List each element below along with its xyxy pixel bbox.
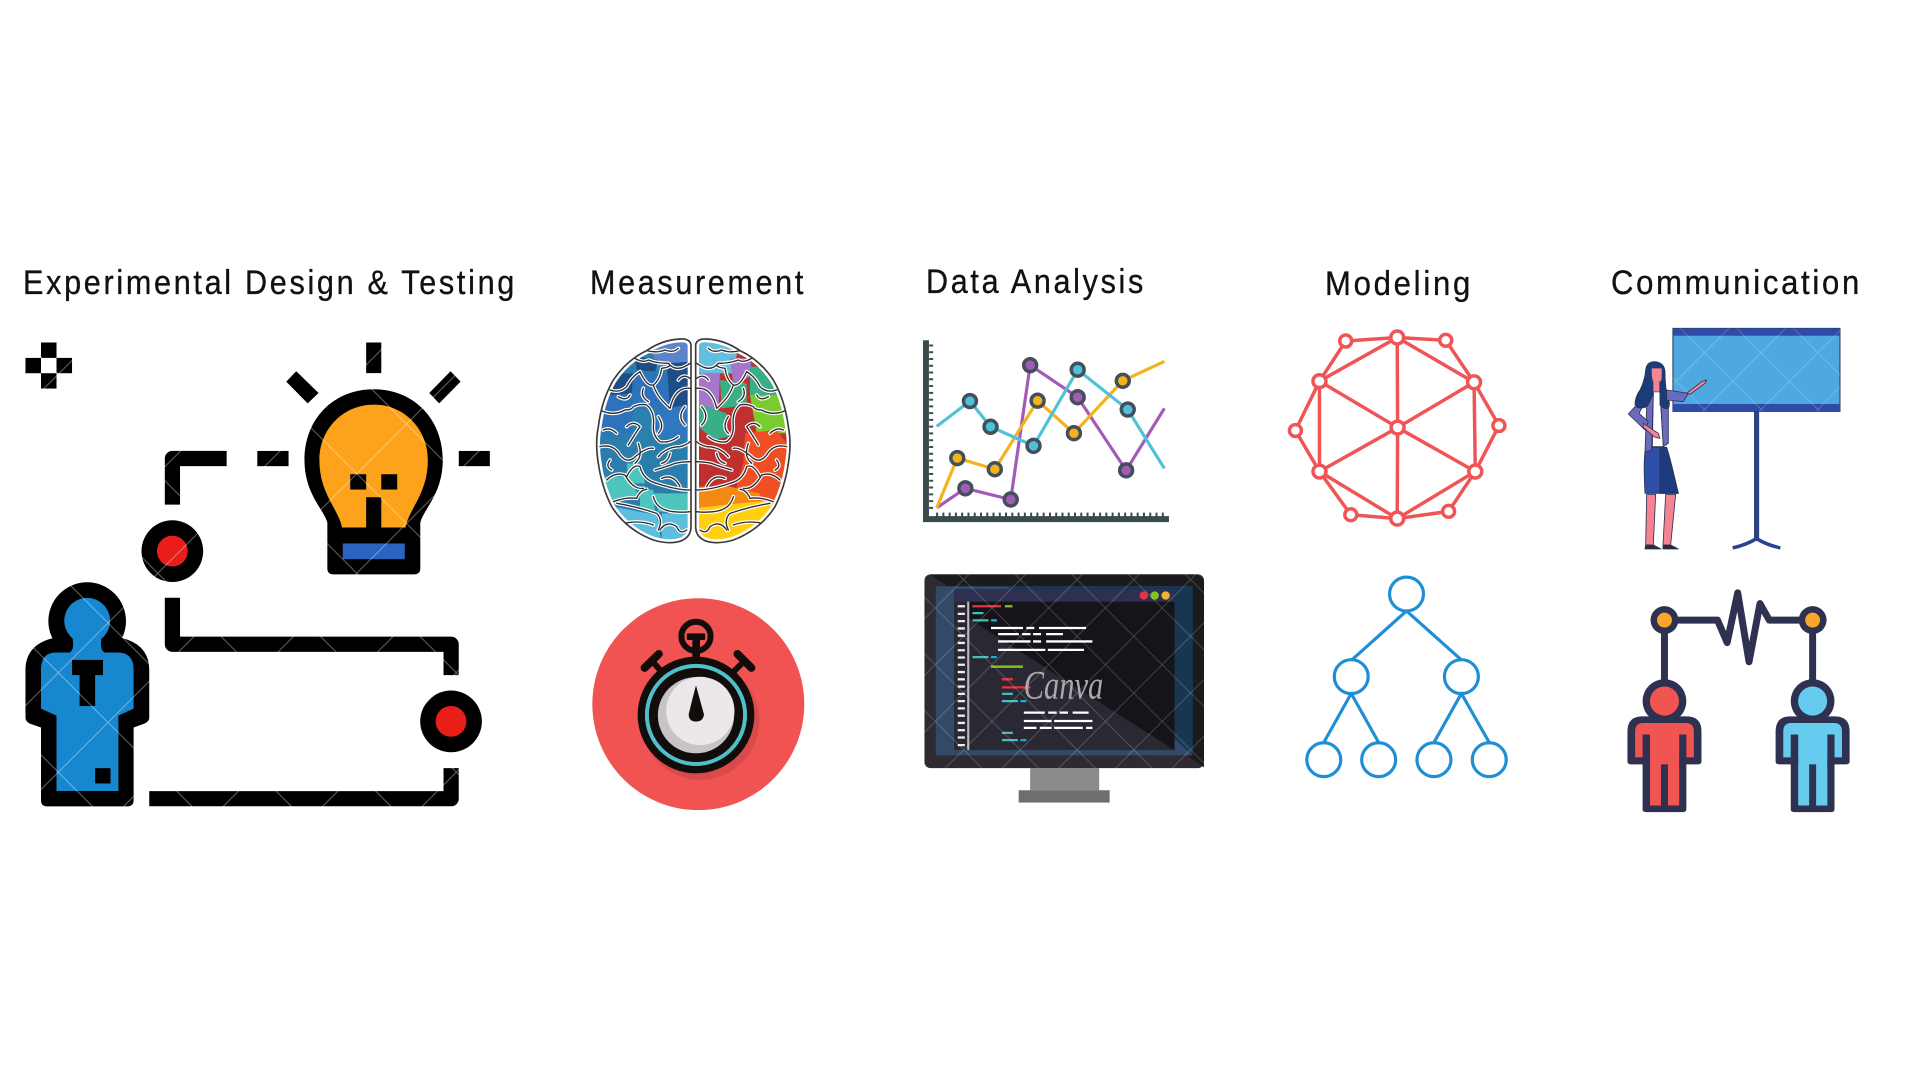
chart: multi-series line chart — [926, 340, 1169, 519]
monitor stand — [1019, 768, 1110, 803]
icon: presentation board on stand — [1673, 328, 1840, 548]
icon: lightbulb — [257, 342, 490, 574]
icon: two people connected by signal — [1627, 593, 1850, 812]
node: upper red dot — [141, 520, 203, 582]
person: blue — [1776, 679, 1850, 812]
signal wire — [1664, 593, 1813, 688]
icon: blue tree diagram — [1307, 577, 1506, 777]
title: Communication: Communication — [1611, 264, 1862, 302]
icon: checker sparkle — [25, 342, 72, 389]
brain: sulci lines — [597, 339, 790, 543]
person: red — [1627, 679, 1701, 812]
title: Modeling: Modeling — [1325, 265, 1473, 303]
title: Measurement: Measurement — [590, 264, 806, 302]
icon: woman presenter — [1628, 362, 1707, 549]
code lines — [958, 602, 1092, 750]
icon: code monitor — [924, 574, 1204, 803]
icon: red stopwatch badge — [592, 598, 804, 810]
brain: right hemisphere — [699, 342, 787, 540]
flow line: second node to person — [149, 768, 451, 799]
infographic canvas — [25, 268, 1858, 812]
icon: red network graph — [1289, 331, 1505, 525]
title: Experimental Design & Testing: Experimental Design & Testing — [23, 264, 517, 302]
icon: colourful brain — [596, 338, 791, 544]
signal node left — [1651, 606, 1678, 634]
series: cyan — [937, 363, 1164, 468]
series: orange — [937, 361, 1164, 508]
flow line: first node to second node — [172, 598, 451, 675]
node: lower red dot — [420, 691, 482, 752]
icon: experiment person and lightbulb flow — [0, 330, 537, 817]
series: purple — [937, 359, 1164, 508]
watermark text: Canva — [1024, 664, 1103, 708]
title: Data Analysis: Data Analysis — [926, 263, 1146, 301]
brain: left hemisphere — [600, 342, 688, 540]
icon: person with tie — [25, 582, 149, 806]
signal node right — [1799, 606, 1827, 634]
monitor body — [924, 574, 1204, 768]
chart axes — [926, 340, 1169, 519]
window controls — [1140, 591, 1170, 600]
flow line: bulb to first node — [172, 459, 227, 505]
